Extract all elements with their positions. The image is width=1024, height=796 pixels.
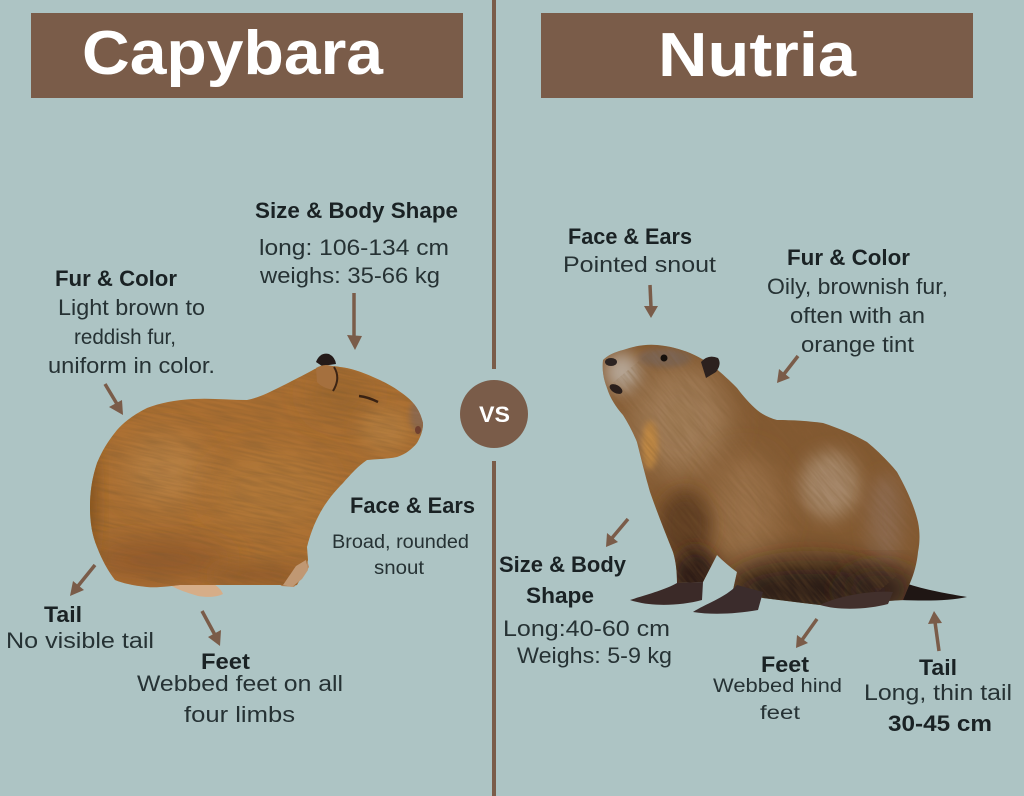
nose and mouth [605,358,624,396]
label: capybara fur and color: Fur & Color [55,266,177,291]
title: Capybara: Capybara [82,19,384,88]
label: capybara face and ears: snout [374,558,425,579]
label: nutria size and body shape: Size & Body [499,552,627,577]
label: capybara face and ears [332,493,475,579]
arrow: capybara tail [70,565,95,596]
label: capybara face and ears: Broad, rounded [332,532,469,553]
label: nutria face and ears [563,224,716,277]
label: capybara tail [6,602,154,653]
ear [701,357,720,378]
label: capybara feet: Feet [201,649,251,674]
front paw [281,556,309,587]
body [602,344,920,605]
ear [316,365,338,390]
label: nutria fur and color: often with an [790,303,925,328]
label: nutria feet [713,652,842,724]
label: nutria tail: Long, thin tail [864,680,1012,705]
label: nutria size and body shape [499,552,672,668]
body [90,366,423,588]
arrow: capybara fur [105,384,123,415]
label: nutria feet: feet [760,703,801,724]
label: capybara fur and color: reddish fur, [74,326,176,349]
hind foot [820,592,893,609]
arrow: capybara feet [202,611,221,646]
arrow: nutria size [606,519,628,547]
eye [359,396,378,402]
vs badge [460,380,528,448]
title: Nutria: Nutria [658,21,857,90]
arrow: nutria feet [796,619,817,648]
label: nutria size and body shape: Weighs: 5-9 kg [517,643,672,668]
label: nutria fur and color [767,245,948,357]
label: capybara size and body shape [255,198,458,288]
arrow: capybara size [347,293,362,350]
vs badge: VS [479,402,510,427]
label: nutria fur and color: orange tint [801,332,914,357]
nose [415,426,421,434]
label: capybara fur and color: uniform in color. [48,353,215,378]
label: capybara feet: Webbed feet on all [137,671,343,696]
label: nutria face and ears: Pointed snout [563,252,716,277]
front feet [630,582,703,605]
label: capybara fur and color: Light brown to [58,295,205,320]
label: capybara tail: Tail [44,602,82,627]
ear tip [316,354,336,366]
label: capybara size and body shape: Size & Body Shape [255,198,458,223]
label: capybara fur and color [48,266,215,378]
label: capybara size and body shape: weighs: 35-66 kg [259,263,440,288]
label: capybara tail: No visible tail [6,628,154,653]
label: nutria feet: Webbed hind [713,676,842,697]
title: Nutria [541,13,973,98]
eye [660,354,668,362]
label: nutria tail [864,655,1012,736]
nutria illustration [602,344,967,614]
label: capybara face and ears: Face & Ears [350,493,475,518]
label: capybara feet [137,649,343,727]
arrow: nutria face [644,285,658,318]
center divider [492,0,496,796]
label: capybara size and body shape: long: 106-134 cm [259,235,449,260]
label: nutria feet: Feet [761,652,810,677]
label: nutria face and ears: Face & Ears [568,224,692,249]
label: nutria fur and color: Fur & Color [787,245,910,270]
title: Capybara [31,13,463,98]
tail [900,583,967,601]
label: capybara feet: four limbs [184,702,295,727]
rear foot [165,581,223,597]
label: nutria tail: Tail [919,655,957,680]
label: nutria fur and color: Oily, brownish fur, [767,274,948,299]
capybara illustration [90,354,423,597]
arrow: nutria tail [928,611,942,651]
label: nutria size and body shape: Long:40-60 cm [503,616,670,641]
paw over body [283,560,308,587]
label: nutria tail: 30-45 cm [888,711,992,736]
label: nutria size and body shape: Shape [526,583,594,608]
arrow: nutria fur [777,356,798,383]
